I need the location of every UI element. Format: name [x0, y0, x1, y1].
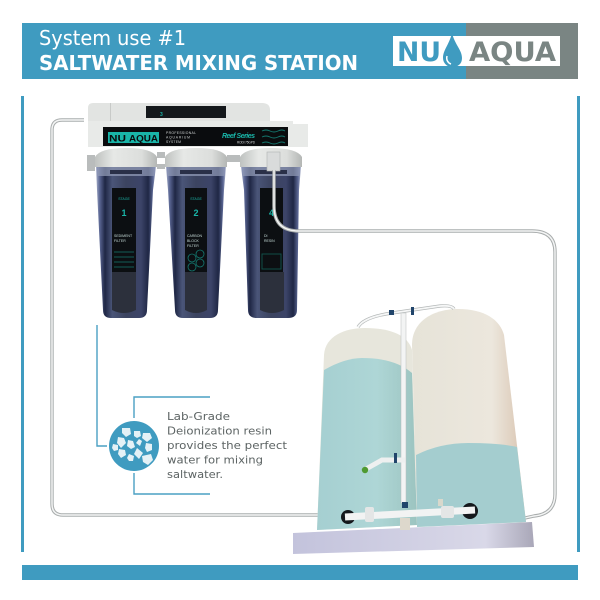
canister 2 carbon block: 2	[193, 208, 199, 218]
canister 1 sediment: SEDIMENT	[114, 234, 133, 238]
tank base	[293, 522, 534, 554]
header banner	[22, 23, 578, 79]
black product label	[103, 127, 288, 146]
stage 3 membrane housing: 3	[160, 112, 163, 118]
logo: Nu Aqua: NU	[397, 37, 441, 68]
water tube: filter to tank, right loop	[274, 170, 555, 518]
callout text: provides the perfect	[167, 440, 287, 452]
saltwater tanks	[293, 306, 534, 554]
canister 2 carbon block: BLOCK	[187, 239, 200, 243]
black product label: SYSTEM	[166, 140, 181, 144]
callout text	[167, 411, 287, 481]
black product label: Reef Series	[222, 133, 255, 140]
canister 4 resin	[240, 148, 302, 318]
heading: system use: System use #1	[39, 26, 186, 50]
tank right	[412, 309, 526, 527]
filter system	[87, 103, 308, 318]
canister 4 resin: RESIN	[264, 239, 275, 243]
black product label: RODI 75GPD	[237, 140, 256, 144]
canister 1 sediment: FILTER	[114, 239, 126, 243]
callout text: Deionization resin	[167, 426, 272, 438]
logo: Nu Aqua	[393, 33, 560, 68]
footer bar	[22, 565, 578, 580]
canister 1 sediment	[95, 148, 157, 318]
leader line	[97, 325, 107, 446]
right side rule	[577, 96, 580, 552]
black product label: PROFESSIONAL	[166, 131, 196, 135]
bottom manifold	[341, 499, 478, 530]
callout text: water for mixing	[167, 454, 263, 466]
callout: deionization resin	[97, 325, 287, 494]
left side rule	[21, 96, 24, 552]
canister 2 carbon block	[165, 148, 227, 318]
connector fittings	[87, 152, 240, 171]
canister 1 sediment: STAGE	[118, 197, 130, 201]
canister 2 carbon block: CARBON	[187, 234, 202, 238]
heading: saltwater mixing station: SALTWATER MIXING STATION	[39, 51, 358, 75]
icon: resin beads	[109, 421, 159, 471]
tank left	[317, 328, 417, 530]
bracket bottom	[134, 473, 210, 494]
pipe valves	[389, 307, 414, 315]
canister 4 resin: DI	[264, 234, 268, 238]
stage 3 membrane housing	[88, 103, 270, 122]
canister 2 carbon block: STAGE	[190, 197, 202, 201]
side tap	[362, 453, 405, 473]
vertical pipe	[401, 313, 406, 503]
bracket top	[134, 397, 210, 418]
outlet fitting	[267, 152, 280, 171]
top pipe	[358, 306, 454, 327]
black product label: AQUARIUM	[166, 136, 190, 140]
canister 1 sediment: 1	[121, 208, 127, 218]
callout text: Lab-Grade	[167, 411, 230, 423]
logo: Nu Aqua: AQUA	[469, 37, 556, 68]
canister 4 resin: 4	[269, 208, 274, 218]
mounting panel	[88, 121, 308, 147]
black product label: AQUA	[129, 134, 158, 144]
canister 2 carbon block: FILTER	[187, 244, 199, 248]
water tube: filter to tank, left loop	[52, 120, 322, 515]
black product label: NU	[109, 134, 126, 144]
callout text: saltwater.	[167, 469, 223, 481]
